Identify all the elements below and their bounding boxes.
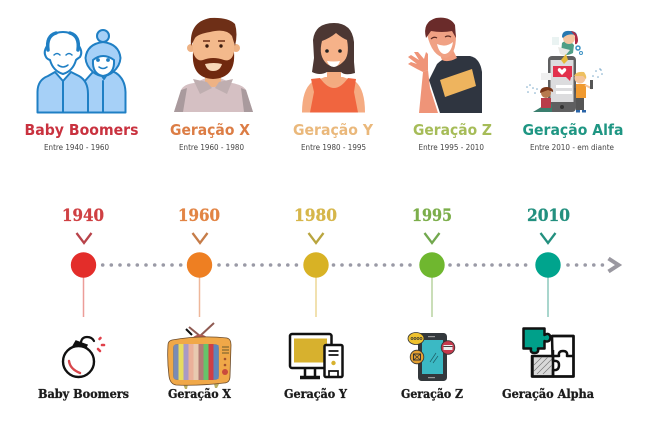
marker: 1980: [294, 206, 337, 317]
text: dates: Entre 1980 - 1995: [301, 143, 366, 152]
marker: 1960: [178, 206, 220, 317]
panel: Geração X generation: [170, 18, 253, 152]
text: dates: Entre 2010 - em diante: [530, 143, 614, 152]
text: dates: Entre 1995 - 2010: [418, 143, 484, 152]
text: dates: Entre 1960 - 1980: [179, 143, 244, 152]
label: Geração Alpha: [502, 386, 594, 401]
marker: 1995: [412, 206, 452, 317]
marker: 1995: 1995: [412, 206, 452, 226]
marker: 1960: 1960: [178, 206, 220, 226]
heading: Geração Y: Geração Y: [293, 121, 374, 139]
marker: 2010: 2010: [527, 206, 570, 226]
heading: Geração X: Geração X: [170, 121, 250, 139]
icon: puzzle pieces: [524, 328, 574, 376]
heading: Geração Alfa: Geração Alfa: [522, 121, 624, 139]
heading: Baby Boomers: Baby Boomers: [24, 121, 138, 139]
icon: bomb: [63, 337, 104, 377]
panel: Baby Boomers generation: [24, 30, 138, 152]
timeline: [62, 206, 618, 317]
marker: 1940: [62, 206, 104, 317]
label: Geração Y: [284, 386, 348, 401]
portrait: young man waving: [408, 18, 482, 113]
panel: puzzle: [502, 328, 594, 401]
marker: 2010: [527, 206, 570, 317]
label: Geração X: [168, 386, 231, 401]
panel: bomb: [38, 337, 129, 401]
panel: Geração Z generation: [408, 18, 492, 152]
dotted line: [101, 263, 604, 267]
panel: Geração Alfa generation: [522, 31, 624, 152]
arrow head: [608, 258, 618, 272]
icon: retro TV: [168, 323, 231, 389]
panel: television: [168, 323, 231, 401]
panel: computer: [284, 334, 348, 401]
heading: Geração Z: Geração Z: [413, 121, 492, 139]
label: Baby Boomers: [38, 386, 129, 401]
illustration: kids around a smartphone: [526, 31, 603, 112]
icon: elderly couple: [38, 30, 126, 112]
icon: smartphone with bubbles: [408, 332, 455, 381]
panel: Geração Y generation: [293, 23, 374, 152]
icon: desktop computer: [290, 334, 342, 378]
panel: smartphone: [401, 332, 463, 401]
text: dates: Entre 1940 - 1960: [44, 143, 109, 152]
marker: 1980: 1980: [294, 206, 337, 226]
marker: 1940: 1940: [62, 206, 104, 226]
portrait: bearded man: [174, 18, 253, 112]
portrait: woman: [302, 23, 365, 112]
label: Geração Z: [401, 386, 463, 401]
